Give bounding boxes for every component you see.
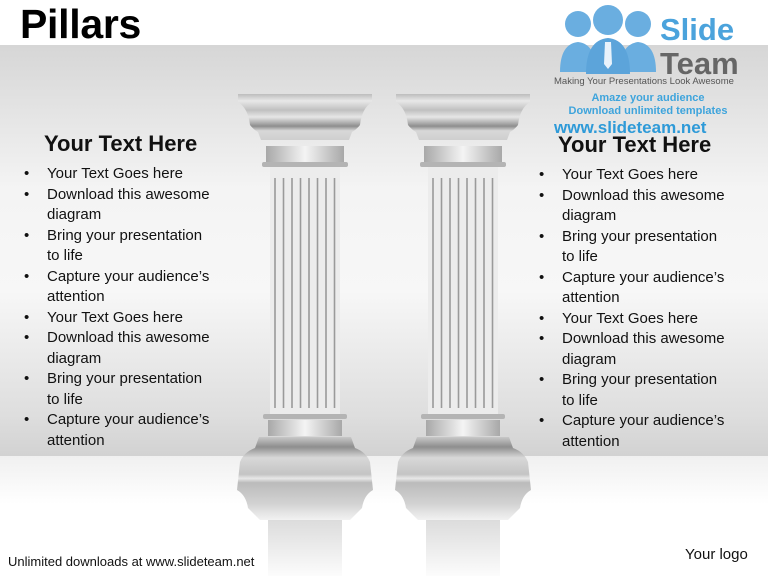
text block: right: Bring your presentation to life [562,371,717,408]
text block: right: Your Text Goes here [562,166,698,183]
text block: right: Your Text Goes here [562,310,698,326]
text block: right: Capture your audience’s attention [562,268,724,306]
pillar: left [237,94,373,576]
logo: SlideTeam: Download unlimited templates [569,105,727,117]
pillar: right [395,94,531,576]
logo: SlideTeam: www.slideteam.net [554,118,706,137]
text block: right: Download this awesome diagram [562,186,725,224]
text block: left: Your Text Goes here [47,165,183,182]
text block: left: Your Text Goes here [47,308,183,326]
text block: left: Bring your presentation to life [47,370,202,408]
logo: SlideTeam: Making Your Presentations Look Awesome [554,76,734,87]
logo: SlideTeam: Amaze your audience [591,92,705,104]
text block: right: Download this awesome diagram [562,330,725,368]
text block: left: Your Text Here [44,131,197,156]
icon: people [560,5,656,74]
text block: right: Capture your audience’s attention [562,412,724,450]
title: Pillars [20,1,141,47]
text block: right: Your Text Here [558,132,711,157]
logo: SlideTeam: Slide [660,12,734,47]
logo: SlideTeam: Team [660,46,739,81]
text block: left: Download this awesome diagram [47,329,210,366]
footer text: Unlimited downloads at www.slideteam.net [8,554,254,569]
text block: left: Capture your audience’s attention [47,411,209,448]
text block: left: Capture your audience’s attention [47,268,209,305]
text block: left: Bring your presentation to life [47,226,202,264]
text block: right: Bring your presentation to life [562,228,717,265]
text block: left [24,131,210,448]
text block: left: Download this awesome diagram [47,186,210,223]
text block: right [540,132,725,450]
logo placeholder: Your logo [685,546,748,563]
logo: SlideTeam [554,5,739,137]
